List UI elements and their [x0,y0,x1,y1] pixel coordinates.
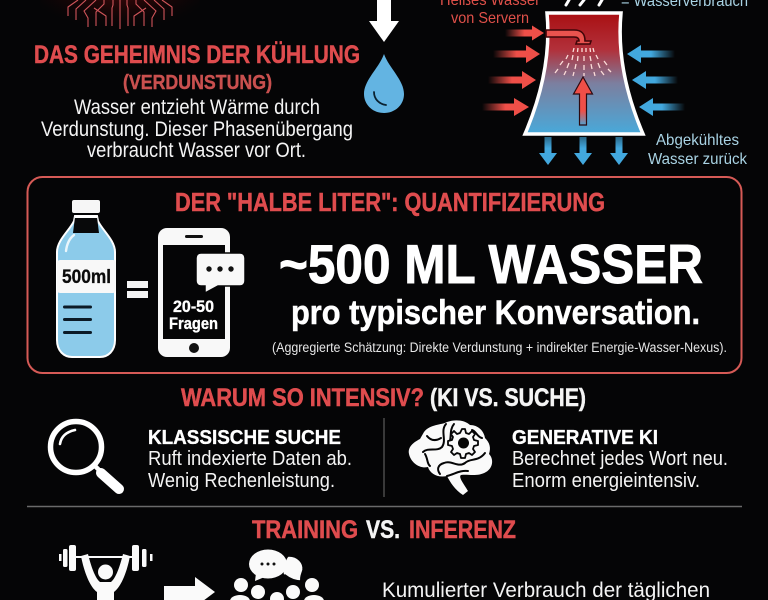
label: Abgekühltes Wasser zurück: Wasser zurück [648,151,748,168]
icon: phone: Fragen [169,314,218,333]
icon: glowing chip circuit [40,0,200,45]
icon: steam strokes [566,0,602,5]
icon: water drop [364,54,404,113]
label: Abgekühltes Wasser zurück [648,132,748,168]
footnote: (Aggregierte Schätzung: Direkte Verdunstung + indirekter Energie-Wasser-Nexus). [272,340,727,355]
heading: Das Geheimnis der Kühlung [34,40,360,94]
icon: cooling tower [525,13,643,134]
heading: Warum so intensiv [181,384,586,412]
text block: klassische Suche: KLASSISCHE SUCHE [148,427,341,449]
text block: Verdunstung [41,96,353,162]
red rising arrow [574,77,592,125]
text block: generative KI: GENERATIVE KI [512,427,658,449]
heading: Training vs. Inferenz: INFERENZ [409,516,516,544]
icon: magnifier [50,422,119,489]
label: Abgekühltes Wasser zurück: Abgekühltes [656,132,739,149]
text block: generative KI [512,427,728,492]
icon: brain with gear [409,420,492,495]
speech bubble [196,253,245,293]
icon: phone [158,228,245,357]
heading: Training vs. Inferenz: TRAINING [252,516,358,544]
icon: weightlifter [59,545,152,600]
subline: pro typischer Konversation. [291,294,700,332]
text block: klassische Suche: Wenig Rechenleistung. [148,470,335,492]
text block: klassische Suche [148,427,352,492]
text block: Verdunstung: Wasser entzieht Wärme durch [74,96,320,119]
heading: Training vs. Inferenz [252,516,516,544]
icon: water bottle: 500ml [62,267,111,288]
water spray [555,48,611,76]
pipe and nozzle [546,30,591,44]
icon: white down arrow [369,0,399,42]
icon: right arrow [164,577,215,600]
heading: quantifizierung: DER "HALBE LITER": QUANTIFIZIERUNG [175,187,605,217]
icon: phone: 20-50 [173,297,214,316]
heading: Warum so intensiv: WARUM SO INTENSIV? [181,384,424,412]
icon: crowd with speech bubbles [230,550,324,600]
text block: generative KI: Enorm energieintensiv. [512,470,700,492]
label: Heißes Wasser: von Servern [451,10,529,27]
big number: ~500 ML WASSER [279,233,703,295]
heading: Das Geheimnis der Kühlung: DAS GEHEIMNIS DER KÜHLUNG [34,40,360,69]
icon: equals sign [127,281,148,298]
text block: Verdunstung: verbraucht Wasser vor Ort. [87,139,306,162]
arrows: hot water in [482,26,544,116]
heading: Training vs. Inferenz: VS. [366,516,400,544]
arrows: cool air in [627,45,685,116]
label: Heißes Wasser [440,0,541,27]
text block: generative KI: Berechnet jedes Wort neu. [512,448,728,470]
panel: Der halbe Liter [28,177,742,373]
icon: water bottle [57,200,116,357]
text block: klassische Suche: Ruft indexierte Daten ab. [148,448,352,470]
heading: Das Geheimnis der Kühlung: (VERDUNSTUNG) [123,72,272,94]
text block: Verdunstung: Verdunstung. Dieser Phasenübergang [41,118,353,141]
heading: Warum so intensiv: (KI VS. SUCHE) [430,384,586,412]
arrows: cooled water down [539,137,628,165]
